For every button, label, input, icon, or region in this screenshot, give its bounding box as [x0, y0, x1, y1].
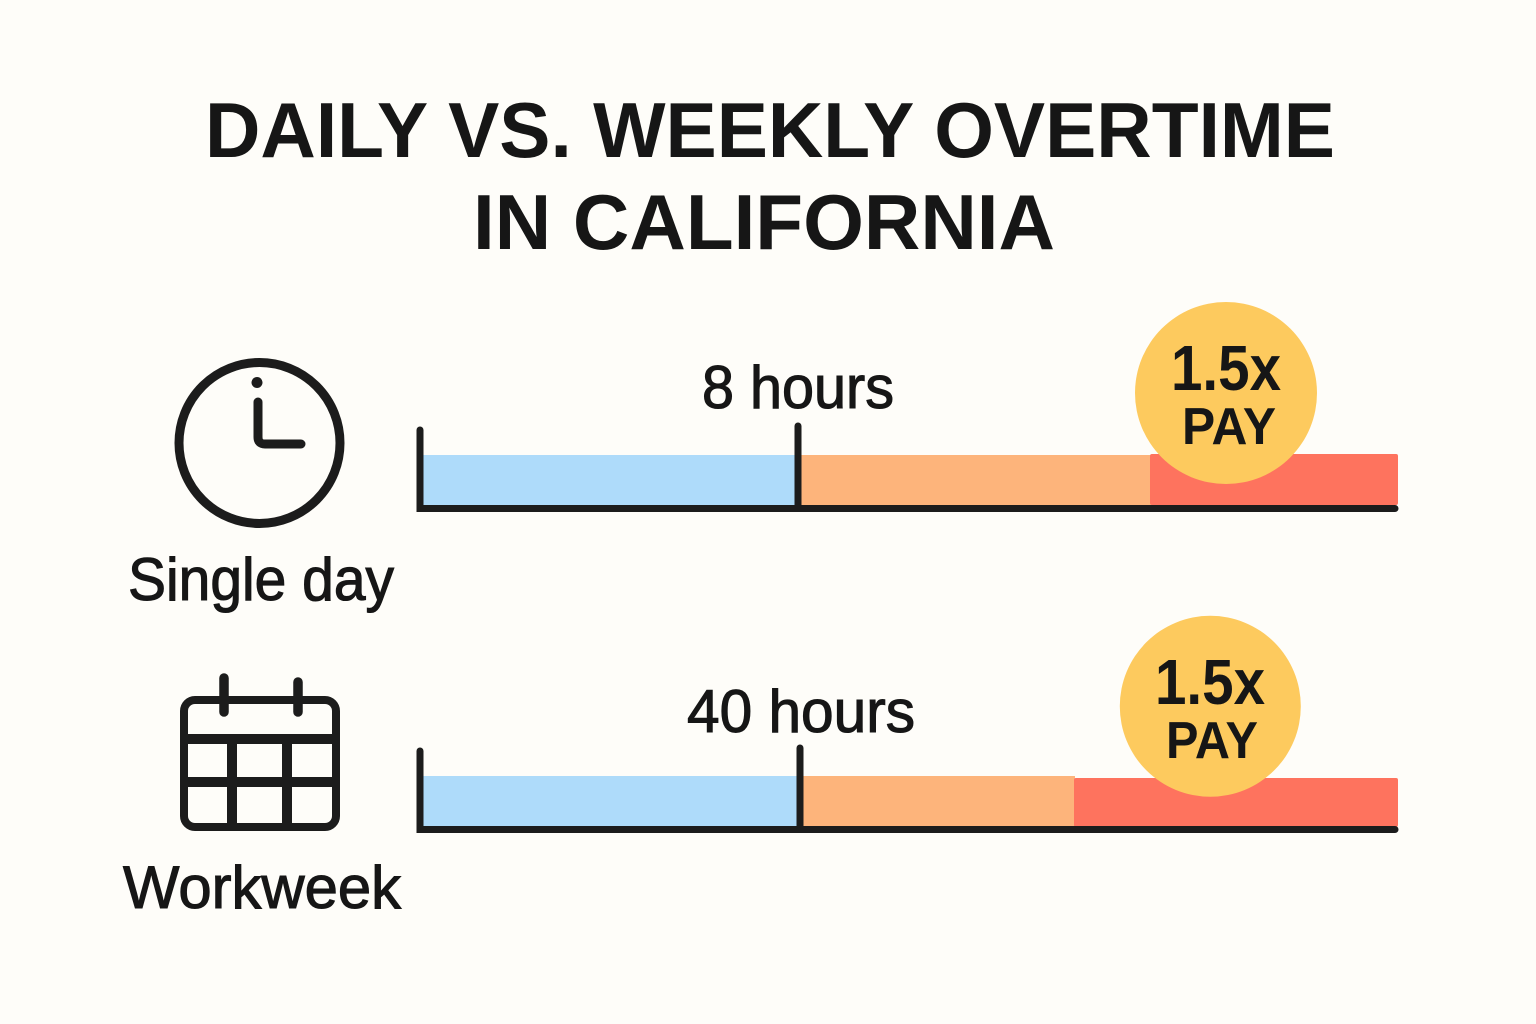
regular hours segment	[420, 776, 800, 827]
label: workweek: Workweek	[123, 854, 402, 921]
title: IN CALIFORNIA	[473, 178, 1055, 266]
icon: calendar	[184, 678, 336, 827]
axis	[420, 426, 1395, 508]
label: 40 hours: 40 hours	[687, 678, 915, 745]
title: DAILY VS. WEEKLY OVERTIME	[205, 86, 1335, 174]
title	[205, 86, 1335, 266]
chart: workweek bar	[420, 748, 1398, 830]
overtime segment	[800, 776, 1075, 827]
chart: single day bar	[420, 426, 1398, 508]
icon: clock	[179, 362, 340, 524]
badge: 1.5x pay, week: PAY	[1166, 712, 1258, 770]
label: 8 hours: 8 hours	[702, 354, 894, 421]
badge: 1.5x pay, day: PAY	[1182, 398, 1276, 456]
badge: 1.5x pay, week: 1.5x	[1155, 646, 1265, 718]
badge: 1.5x pay, week	[1120, 616, 1301, 797]
regular hours segment	[420, 455, 798, 505]
double-time segment	[1074, 778, 1398, 827]
badge: 1.5x pay, day: 1.5x	[1171, 332, 1281, 404]
label: single day: Single day	[128, 546, 394, 613]
axis	[420, 748, 1395, 830]
badge: 1.5x pay, day	[1135, 302, 1317, 484]
overtime segment	[798, 455, 1152, 505]
double-time segment	[1150, 454, 1398, 505]
